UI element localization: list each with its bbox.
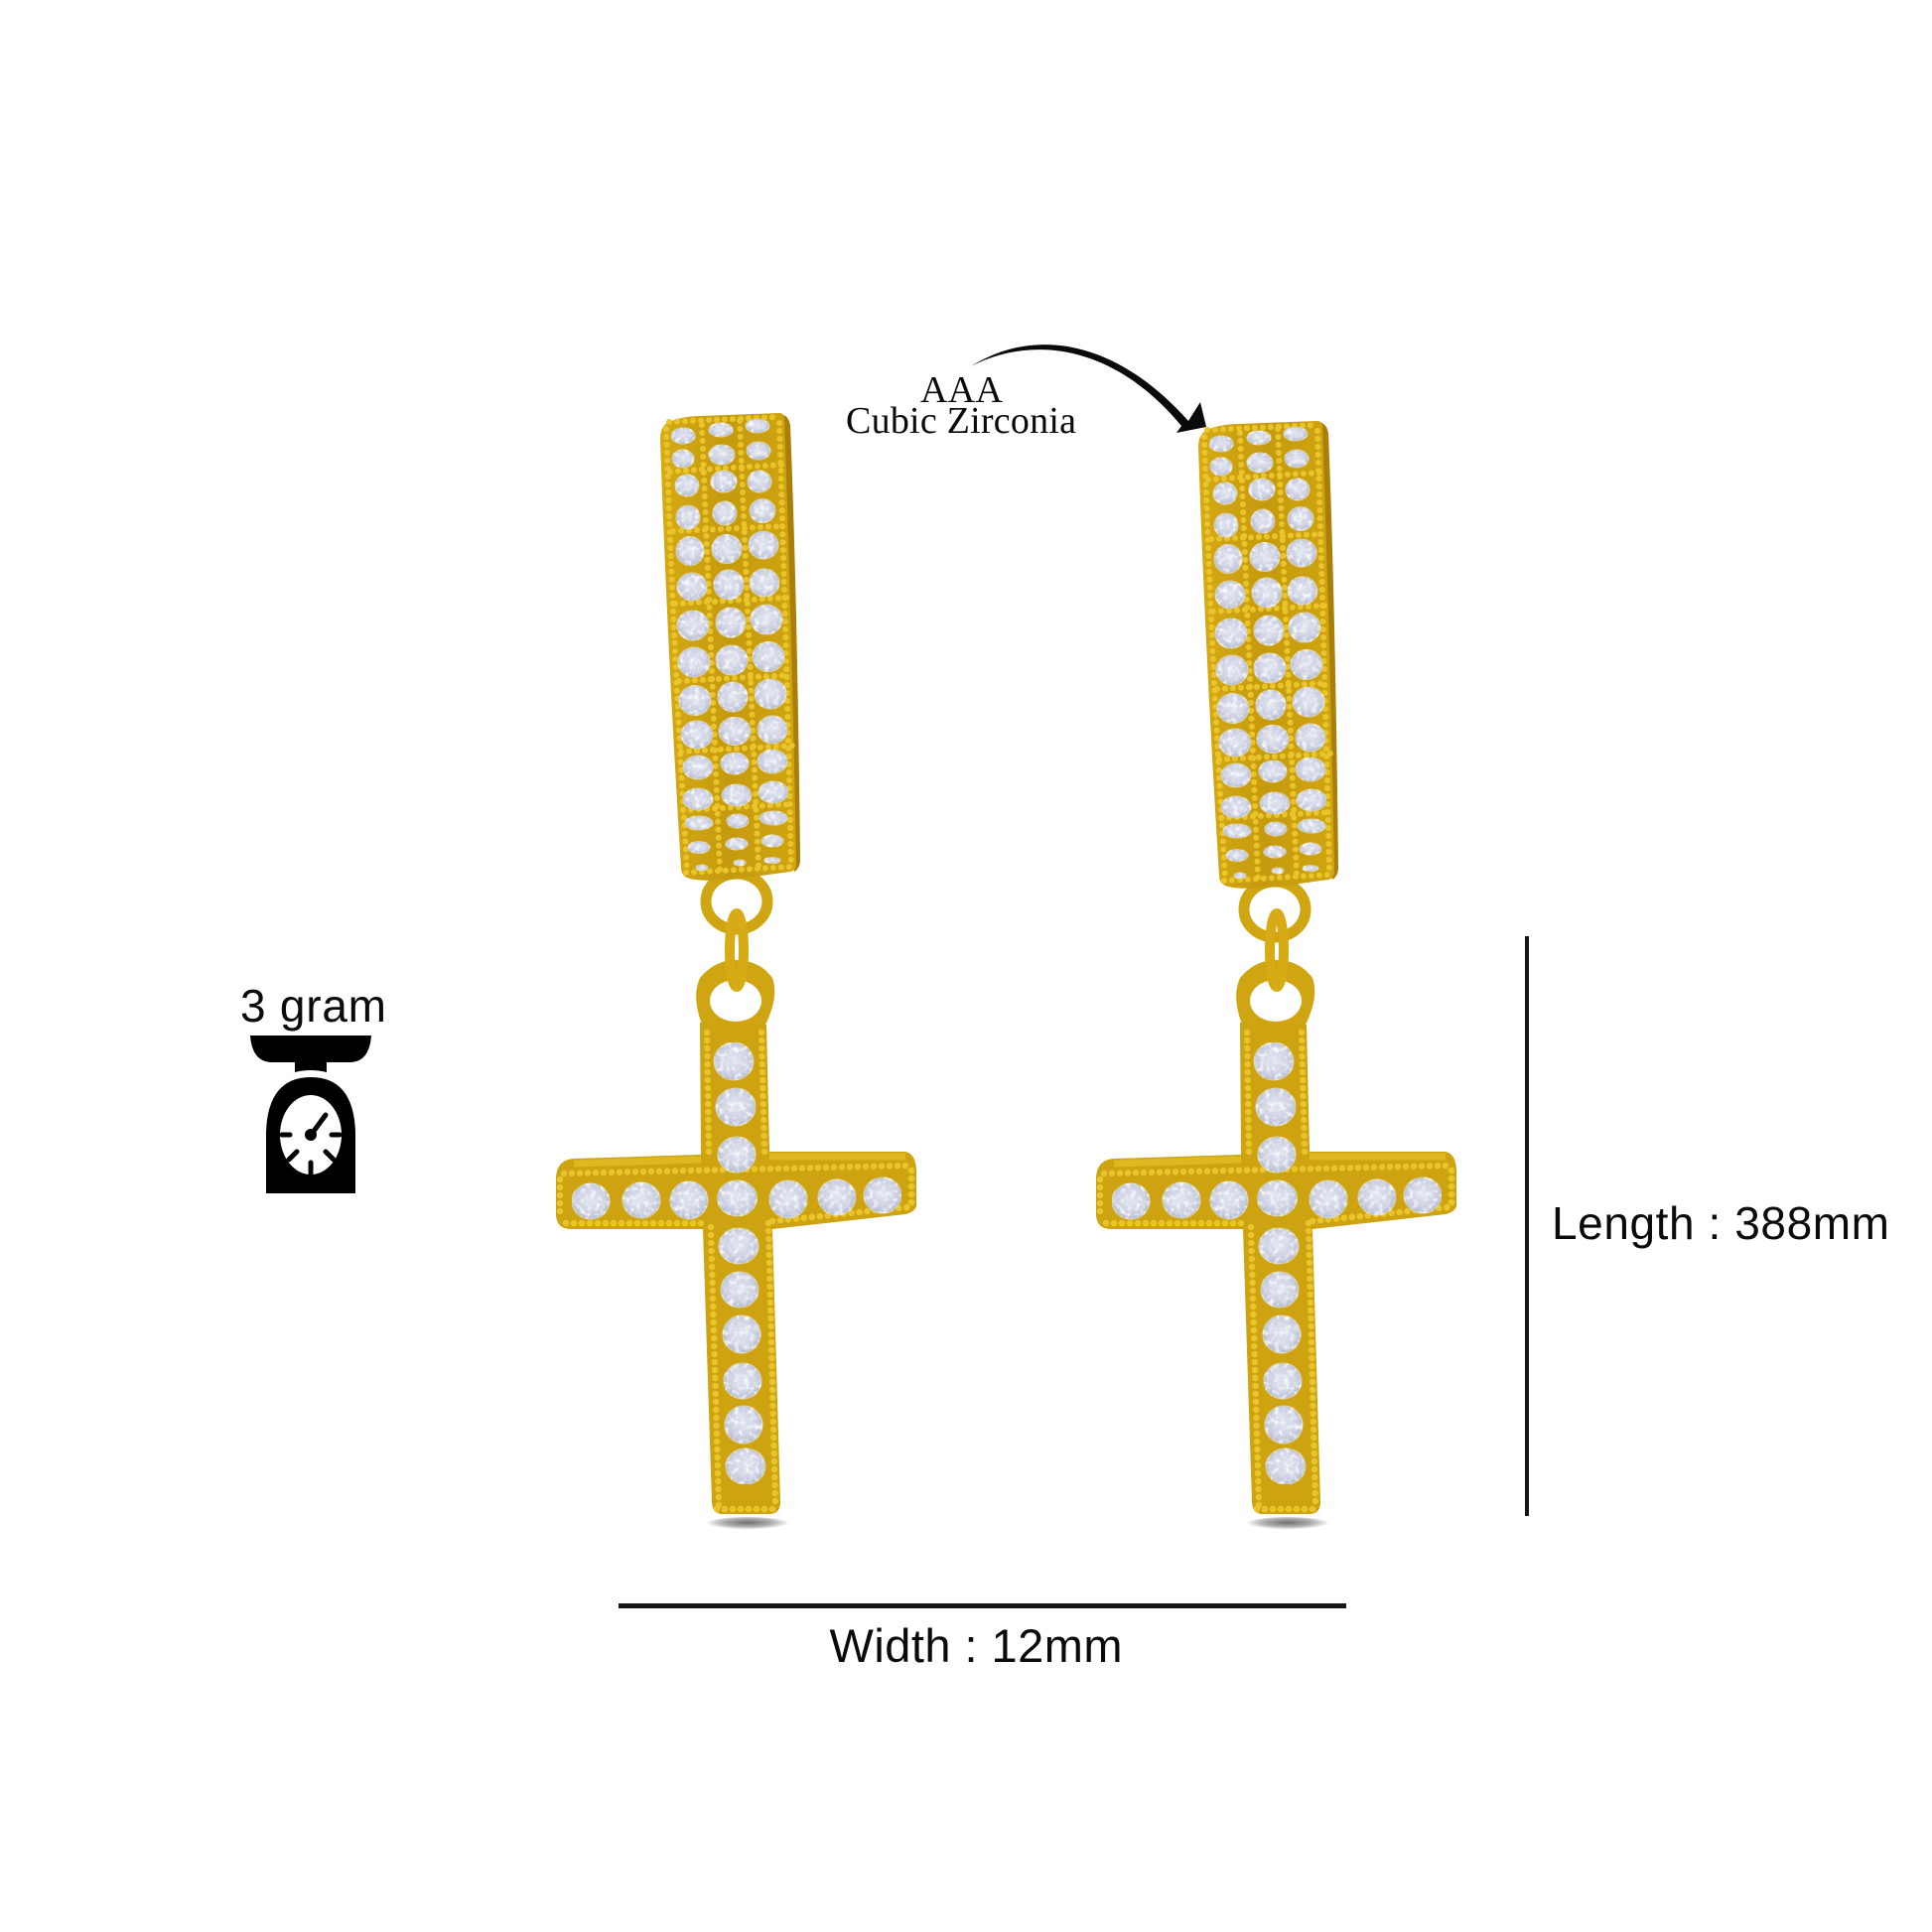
left cross pendant (556, 913, 916, 1531)
left hoop (660, 413, 800, 929)
callout: AAA Cubic Zirconia (846, 345, 1206, 442)
weight icon with label (240, 980, 386, 1193)
hoop milgrain beads (666, 417, 792, 873)
icon: kitchen scale (250, 1035, 371, 1193)
hoop side band (780, 414, 800, 872)
width label: Width : 12mm (830, 1619, 1122, 1672)
width dimension (619, 1603, 1346, 1672)
width line (619, 1603, 1346, 1608)
cross loop (696, 960, 774, 1027)
cross milgrain beads (560, 1033, 911, 1509)
length dimension (1525, 936, 1889, 1516)
right hoop (1198, 421, 1338, 937)
right earring (1096, 421, 1456, 1531)
label: AAA: AAA (920, 369, 1004, 411)
cross top highlight (574, 1157, 905, 1164)
length label: Length : 388mm (1552, 1197, 1889, 1249)
cross loop opening (710, 980, 761, 1022)
right cross pendant (1096, 913, 1456, 1531)
hoop stones (671, 419, 788, 871)
cross stones (572, 1042, 901, 1484)
label: 3 gram: 3 gram (240, 980, 386, 1032)
arrow (971, 345, 1206, 433)
hoop front face (660, 413, 796, 881)
jump ring (730, 913, 744, 987)
cross body (556, 1023, 916, 1514)
left earring (556, 413, 916, 1531)
length line (1525, 936, 1529, 1516)
label: Cubic Zirconia: Cubic Zirconia (846, 400, 1076, 442)
cross shadow (706, 1517, 789, 1531)
bail ring (706, 874, 767, 929)
